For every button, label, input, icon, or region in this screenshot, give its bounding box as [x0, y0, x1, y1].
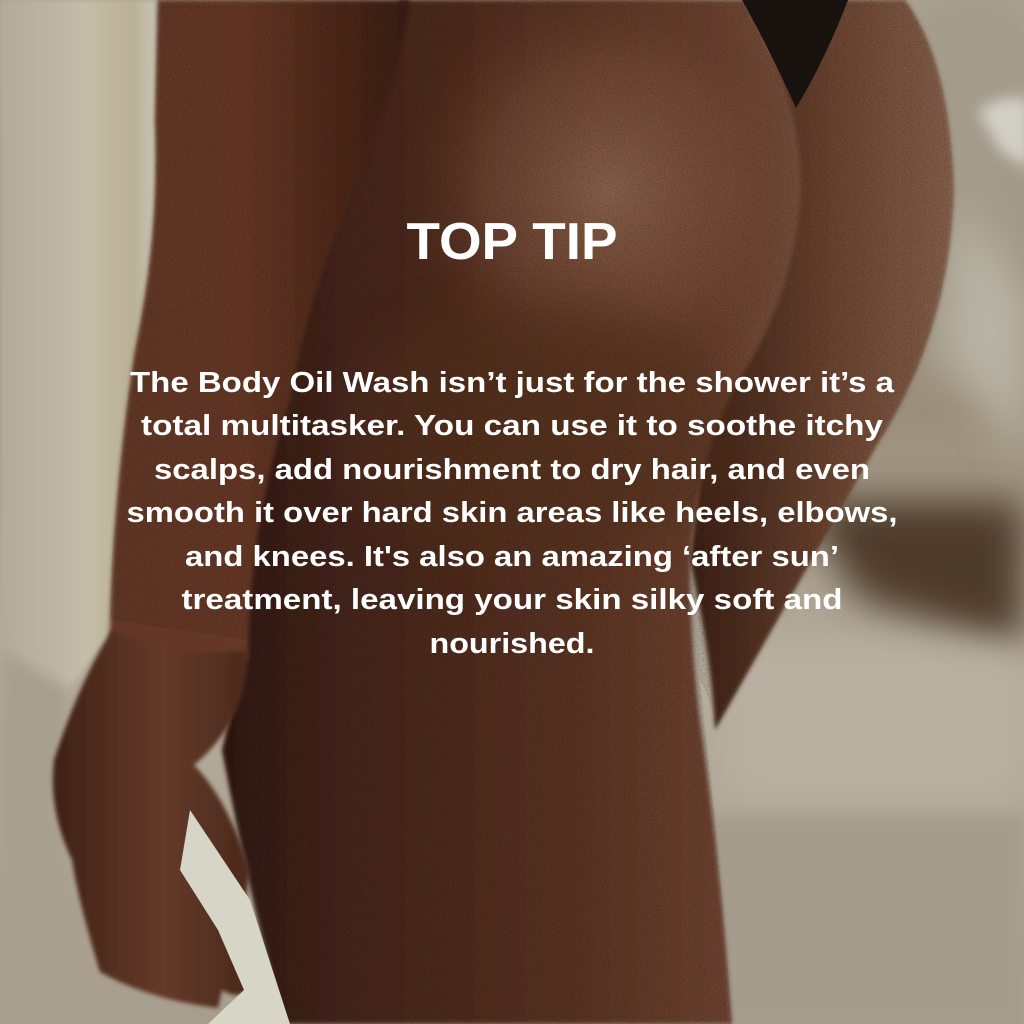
near leg and hip	[222, 0, 820, 1024]
body text: nourished.	[430, 628, 594, 660]
body text: scalps, add nourishment to dry hair, and even	[154, 454, 870, 486]
title: TOP TIP	[406, 213, 618, 271]
body text	[126, 367, 898, 660]
body text: treatment, leaving your skin silky soft and	[182, 584, 842, 616]
towel	[180, 810, 290, 1024]
body text: smooth it over hard skin areas like heels, elbows,	[126, 497, 898, 529]
far leg	[690, 0, 954, 730]
curtain	[0, 0, 210, 1024]
garment	[742, 0, 848, 108]
body text: total multitasker. You can use it to soothe itchy	[141, 410, 883, 442]
body text: and knees. It's also an amazing ‘after sun’	[185, 541, 839, 573]
body text: The Body Oil Wash isn’t just for the shower it’s a	[130, 367, 895, 399]
hand	[53, 630, 253, 1008]
arm	[110, 0, 410, 667]
